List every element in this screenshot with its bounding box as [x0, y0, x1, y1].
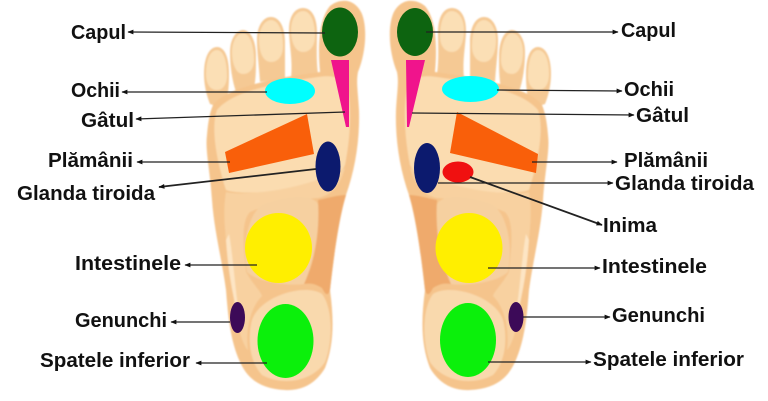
label: Genunchi [75, 310, 167, 332]
zone: lungs [225, 114, 314, 173]
zone: throat [406, 60, 425, 127]
right labels [593, 20, 755, 371]
label: Intestinele [602, 256, 707, 278]
arrow: Inima right [470, 177, 602, 225]
label: Ochii [624, 79, 674, 101]
zone: heart [442, 162, 474, 182]
right foot zones [397, 8, 538, 377]
label: Gâtul [81, 110, 134, 132]
arrow: Genunchi right [523, 316, 610, 318]
label: Spatele inferior [593, 349, 744, 371]
arrow: Intestinele right [488, 267, 600, 269]
zone: intestines [245, 213, 312, 283]
label: Ochii [71, 80, 120, 102]
arrow: Gatul left [136, 112, 345, 119]
left labels [17, 22, 190, 372]
zone: lower back [440, 303, 496, 377]
arrow: Intestinele left [185, 264, 257, 266]
arrow: Spatele left [196, 362, 267, 364]
label: Capul [71, 22, 126, 44]
label: Genunchi [612, 305, 705, 327]
arrow: Glanda left [159, 169, 316, 187]
zone: thyroid [414, 143, 440, 193]
pointer lines [122, 32, 634, 363]
zone: eyes [265, 78, 315, 104]
label: Glanda tiroida [17, 183, 156, 205]
zone: head [397, 8, 433, 56]
left foot zones [225, 8, 358, 378]
label: Inima [603, 215, 658, 237]
arrow: Plamanii left [137, 161, 230, 163]
zone: knee [230, 302, 245, 333]
zone: thyroid [316, 142, 340, 192]
zone: throat [331, 60, 349, 127]
zone: head [322, 8, 358, 56]
arrow: Ochii right [497, 90, 622, 91]
arrow: Ochii left [122, 91, 267, 93]
label: Plămânii [624, 150, 708, 172]
zone: knee [508, 302, 524, 332]
arrow: Genunchi left [171, 321, 230, 323]
right foot [390, 1, 551, 390]
arrow: Capul left [128, 32, 325, 33]
label: Glanda tiroida [615, 173, 755, 195]
zone: eyes [442, 76, 499, 102]
arrow: Plamanii right [532, 161, 617, 163]
zone: lungs [450, 112, 538, 173]
zone: intestines [436, 213, 502, 283]
arrow: Gatul right [412, 113, 634, 115]
arrow: Capul right [426, 31, 618, 33]
label: Gâtul [636, 105, 689, 127]
label: Intestinele [75, 253, 181, 275]
arrow: Glanda right [438, 182, 613, 184]
left foot [204, 1, 365, 390]
label: Spatele inferior [40, 350, 190, 372]
label: Capul [621, 20, 676, 42]
label: Plămânii [48, 150, 133, 172]
zone: lower back [258, 304, 314, 378]
arrow: Spatele right [488, 361, 591, 363]
